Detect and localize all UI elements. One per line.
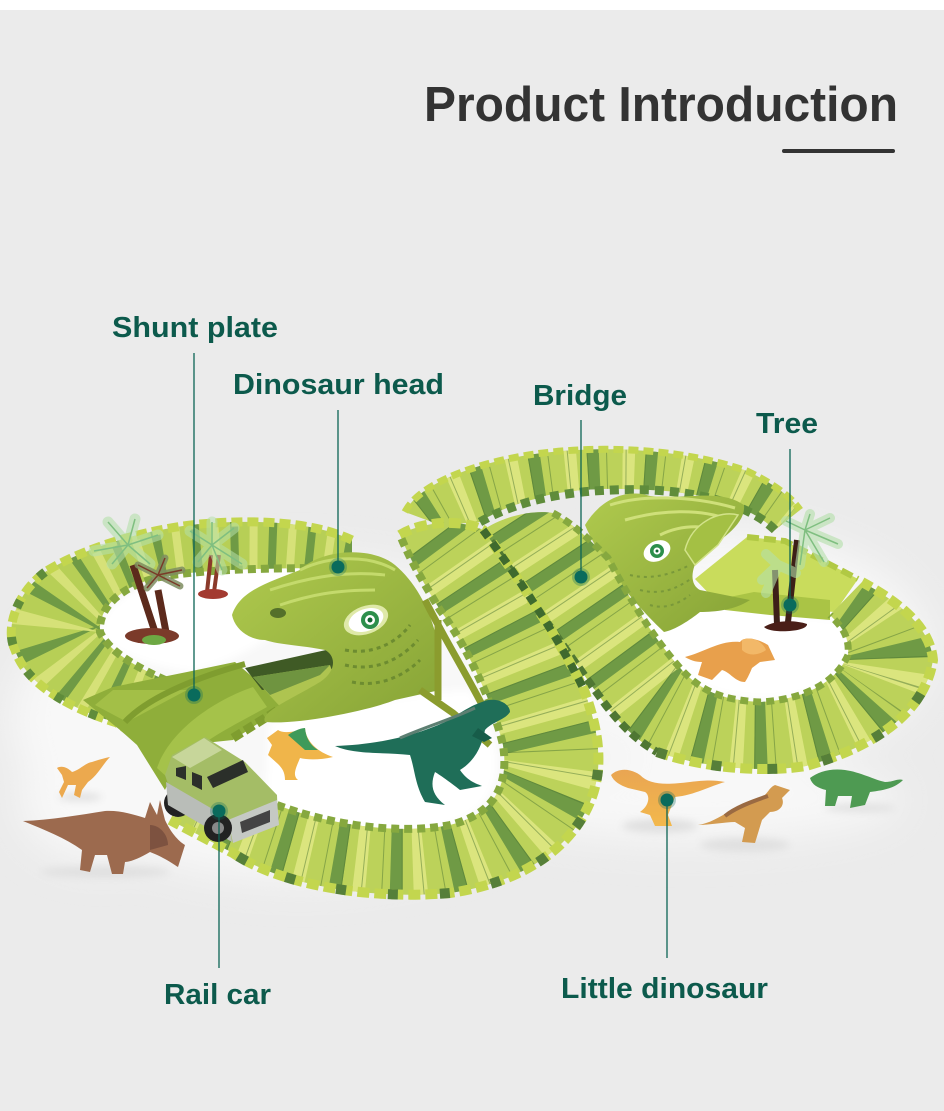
icon: brown raptor bbox=[698, 785, 790, 843]
icon: small orange dinosaur bbox=[57, 757, 110, 798]
callout: little dinosaur: Little dinosaur bbox=[561, 973, 768, 1005]
icon: right tree bbox=[762, 514, 838, 631]
icon: tree (back small) bbox=[190, 522, 242, 599]
callout: bridge bbox=[533, 380, 627, 586]
track: left ring bbox=[6, 517, 354, 733]
icon: tree (left) bbox=[94, 519, 182, 645]
icon: rail car bbox=[164, 737, 279, 843]
track: right ring and bridge bbox=[480, 500, 940, 780]
callout: shunt plate bbox=[112, 312, 278, 704]
icon: green ankylosaur bbox=[810, 769, 903, 808]
callout: rail car: Rail car bbox=[164, 979, 271, 1011]
soft white floor glow bbox=[10, 530, 930, 880]
white floor inside loops bbox=[100, 565, 850, 832]
icon: right dinosaur head bbox=[585, 494, 750, 632]
track: back ring bbox=[400, 440, 810, 535]
title: Product Introduction bbox=[424, 78, 898, 132]
icon: brown styracosaurus bbox=[23, 800, 185, 874]
callout: bridge: Bridge bbox=[533, 380, 627, 412]
callout: shunt plate: Shunt plate bbox=[112, 312, 278, 344]
icon: left dinosaur head bbox=[232, 552, 441, 722]
callout: tree bbox=[756, 408, 818, 614]
bridge supports bbox=[420, 600, 490, 745]
title underline bbox=[782, 149, 895, 153]
callout: dinosaur head bbox=[233, 369, 444, 576]
icon: orange raptor bbox=[611, 770, 725, 826]
icon: spined dinosaur bbox=[267, 728, 333, 780]
callout: tree: Tree bbox=[756, 408, 818, 440]
tree platform behind right head bbox=[695, 537, 858, 620]
icon: orange triceratops bbox=[685, 638, 775, 682]
track: bottom ring and bridge bbox=[170, 515, 610, 905]
callout: dinosaur head: Dinosaur head bbox=[233, 369, 444, 401]
soft dinosaur shadows bbox=[40, 793, 896, 878]
icon: t-rex bbox=[335, 700, 510, 805]
callout: rail car bbox=[164, 802, 271, 1011]
callout: little dinosaur bbox=[561, 791, 768, 1005]
panel: shunt plate bbox=[83, 662, 283, 790]
